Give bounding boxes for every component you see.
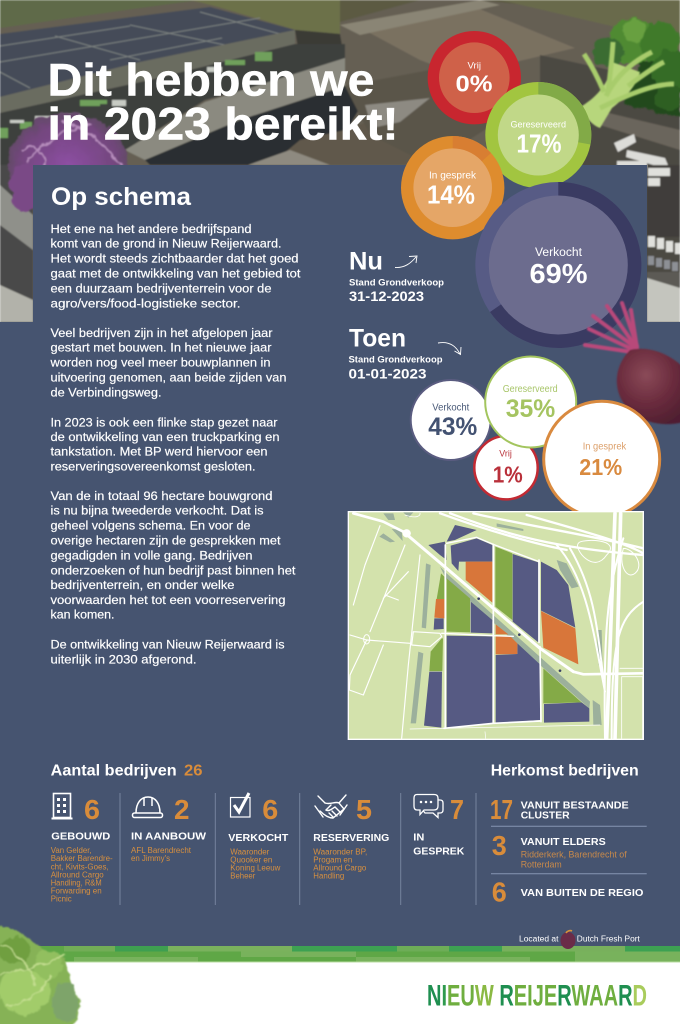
text block: body copy: kan komen. <box>50 608 114 622</box>
stat: in gesprek <box>413 794 465 857</box>
title <box>48 55 398 149</box>
logo: Nieuw Reijerwaard: NIEUW REIJERWAARD <box>427 980 647 1012</box>
origin: elders <box>492 830 627 870</box>
site map <box>348 512 643 739</box>
text block: body copy: gestart met bouwen. In het nieuwe jaar <box>50 341 272 355</box>
stat: gebouwd: Picnic <box>51 894 72 903</box>
photo: red cabbage <box>8 113 128 217</box>
stat: verkocht: Koning Leeuw <box>230 864 281 873</box>
gauge: Gereserveerd 17% <box>485 82 591 188</box>
text block: body copy <box>49 222 301 666</box>
located at Dutch Fresh Port: Dutch Fresh Port <box>577 935 641 944</box>
stat: gebouwd: 6 <box>84 794 100 825</box>
text block: body copy: bedrijventerrein, en onder welke <box>50 578 235 592</box>
stat: in gesprek: 7 <box>450 794 464 825</box>
photo: beetroot <box>585 303 680 424</box>
stat: verkocht: VERKOCHT <box>228 832 289 844</box>
origin: elders: Ridderkerk, Barendrecht of <box>521 850 627 860</box>
stat: in aanbouw: AFL Barendrecht <box>131 846 192 855</box>
text block: body copy: gegadigden in volle gang. Bedrijven <box>50 548 252 562</box>
heading: Aantal bedrijven: 26 <box>184 762 203 779</box>
heading: Toen: Toen <box>349 325 406 353</box>
text block: body copy: De ontwikkeling van Nieuw Reijerwaard is <box>50 638 284 652</box>
stat: reservering: Handling <box>313 872 344 881</box>
origin: bestaande cluster: CLUSTER <box>521 809 570 821</box>
text block: body copy: Het wordt steeds zichtbaarder dat het goed <box>50 252 298 266</box>
stat: in gesprek: IN <box>413 832 424 844</box>
stat: verkocht <box>228 793 289 881</box>
stat: reservering: Progam en <box>313 856 352 865</box>
gauge: Verkocht 69% <box>475 182 641 348</box>
text block: body copy: een duurzaam bedrijventerrein voor de <box>50 281 272 295</box>
icon: building <box>52 794 72 818</box>
title: Dit hebben we <box>48 55 375 106</box>
bubble: Verkocht 43%: 43% <box>428 413 477 441</box>
origin: elders: 3 <box>492 830 507 861</box>
origin: bestaande cluster: 17 <box>490 794 513 825</box>
stat: in aanbouw: IN AANBOUW <box>131 830 206 842</box>
aerial photo background <box>0 0 680 330</box>
footer: green band <box>0 946 680 962</box>
heading: Nu: 31-12-2023 <box>349 288 424 304</box>
gauge: Verkocht 69%: 69% <box>530 258 588 289</box>
text block: body copy: de Verbindingsweg. <box>50 386 162 400</box>
text block: body copy: komt van de grond in Nieuw Reijerwaard. <box>50 237 282 251</box>
bubble: Gereserveerd 35%: Gereserveerd <box>503 384 558 395</box>
text block: body copy: Het ene na het andere bedrijfspand <box>50 222 252 236</box>
origin: buiten de regio <box>492 877 643 908</box>
gauge: In gesprek 14%: 14% <box>427 179 475 209</box>
text block: body copy: agro/vers/food-logistieke sector. <box>50 296 241 310</box>
origin: bestaande cluster: VANUIT BESTAANDE <box>521 799 629 811</box>
stat: gebouwd <box>51 794 113 903</box>
title: in 2023 bereikt! <box>48 98 398 149</box>
stat: in aanbouw: en Jimmy's <box>131 854 170 863</box>
photo: lettuce <box>0 927 79 1024</box>
stat: gebouwd: Allround Cargo <box>51 870 104 879</box>
footer: white strip <box>0 962 680 1024</box>
stat: gebouwd: Forwarding en <box>51 886 102 895</box>
text block: body copy: voorwaarden het tot een voorreservering <box>50 593 286 607</box>
icon: handshake <box>315 795 347 818</box>
panel: navy main background <box>0 165 680 946</box>
text block: body copy: overige hectaren zijn de gesprekken met <box>50 534 281 548</box>
stat: gebouwd: cht, Kivits-Goes, <box>51 862 109 871</box>
text block: body copy: Veel bedrijven zijn in het afgelopen jaar <box>50 326 272 340</box>
bubble: In gesprek 21% <box>544 401 660 517</box>
text block: body copy: geheel volgens schema. En voor de <box>50 519 251 533</box>
heading: Toen: Stand Grondverkoop <box>348 354 443 365</box>
origin: buiten de regio: 6 <box>492 877 507 908</box>
gauge: Vrij 0% <box>428 31 521 124</box>
heading: Nu <box>349 247 444 304</box>
icon: chat bubbles <box>414 794 443 818</box>
text block: body copy: worden nog veel meer bouwplannen in <box>49 356 271 370</box>
text block: body copy: reserveringsovereenkomst gesloten. <box>50 460 256 474</box>
stat: reservering: Waaronder BP, <box>313 848 367 857</box>
origin: elders: Rotterdam <box>521 860 562 870</box>
arrow: Toen <box>438 343 461 354</box>
text block: body copy: onderzoeken of hun bedrijf past binnen het <box>50 563 296 577</box>
text block: body copy: uiterlijk in 2030 afgerond. <box>50 652 196 666</box>
text block: body copy: is nu bijna tweederde verkocht. Dat is <box>50 504 264 518</box>
heading: Toen <box>348 325 443 381</box>
stat: verkocht: Beheer <box>230 872 256 881</box>
heading: Op schema: Op schema <box>51 183 192 211</box>
bubble: Vrij 1%: 1% <box>493 461 523 487</box>
gauge: In gesprek 14% <box>401 136 504 239</box>
heading: Herkomst bedrijven: Herkomst bedrijven <box>491 762 639 779</box>
gauge: Gereserveerd 17%: Gereserveerd <box>510 120 566 130</box>
stat: in aanbouw <box>131 794 206 863</box>
stat: gebouwd: Bakker Barendre- <box>51 854 113 863</box>
stat: reservering <box>313 794 389 881</box>
icon: checkbox <box>230 793 250 817</box>
photo: broccoli <box>582 18 680 128</box>
origin: bestaande cluster <box>490 794 629 825</box>
gauge: In gesprek 14%: In gesprek <box>429 169 477 181</box>
bubble: Vrij 1%: Vrij <box>499 449 512 460</box>
text block: body copy: tankstation. Met BP werd hiervoor een <box>50 445 268 459</box>
icon: hard hat <box>132 797 162 818</box>
gauge: Vrij 0%: 0% <box>456 71 492 97</box>
heading: Aantal bedrijven: Aantal bedrijven <box>51 762 177 779</box>
stat: reservering: 5 <box>356 794 372 825</box>
bubble: Vrij 1% <box>474 436 538 499</box>
text block: body copy: In 2023 is ook een flinke stap gezet naar <box>50 415 278 429</box>
gauge: Gereserveerd 17%: 17% <box>516 129 562 159</box>
gauge: Verkocht 69%: Verkocht <box>535 247 583 259</box>
bubble: In gesprek 21%: In gesprek <box>583 442 627 453</box>
heading: Nu: Nu <box>349 247 383 275</box>
text block: body copy: de ontwikkeling van een truckparking en <box>50 430 280 444</box>
bubble: Verkocht 43% <box>411 380 491 460</box>
bubble: Gereserveerd 35% <box>485 356 576 448</box>
heading: Nu: Stand Grondverkoop <box>349 277 444 288</box>
bubble: Verkocht 43%: Verkocht <box>432 402 469 414</box>
bubble: In gesprek 21%: 21% <box>579 454 622 480</box>
located at Dutch Fresh Port <box>519 931 641 949</box>
stat: in gesprek: GESPREK <box>413 845 465 857</box>
stat: verkocht: Quooker en <box>230 856 272 865</box>
stat: reservering: RESERVERING <box>313 832 389 844</box>
located at Dutch Fresh Port: Located at <box>519 935 559 944</box>
text block: body copy: gaat met de ontwikkeling van het gebied tot <box>50 267 301 281</box>
origin: elders: VANUIT ELDERS <box>521 836 606 848</box>
stat: verkocht: Waaronder <box>230 848 270 857</box>
text block: body copy: Van de in totaal 96 hectare bouwgrond <box>50 489 272 503</box>
bubble: Gereserveerd 35%: 35% <box>506 395 555 423</box>
heading: Toen: 01-01-2023 <box>348 365 427 381</box>
arrow: Nu <box>395 256 417 268</box>
stat: gebouwd: GEBOUWD <box>51 830 111 842</box>
origin: buiten de regio: VAN BUITEN DE REGIO <box>521 887 643 899</box>
stat: in aanbouw: 2 <box>174 794 190 825</box>
gauge: Vrij 0%: Vrij <box>468 60 481 72</box>
stat: verkocht: 6 <box>262 794 278 825</box>
text block: body copy: uitvoering genomen, aan beide zijden van <box>50 371 286 385</box>
stat: gebouwd: Handling, R&M <box>51 878 102 887</box>
stat: reservering: Allround Cargo <box>313 864 367 873</box>
stat: gebouwd: Van Gelder, <box>51 846 92 855</box>
